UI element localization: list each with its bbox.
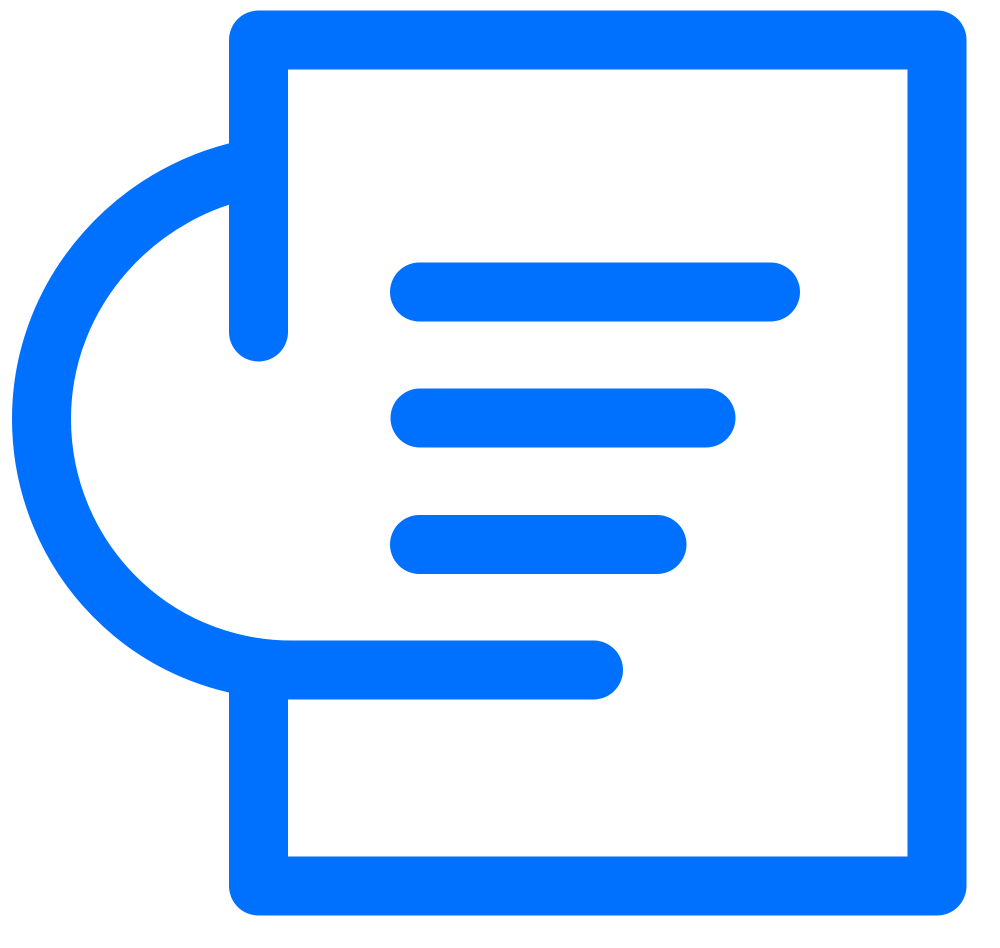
- text line 1: [420, 262, 770, 322]
- curved arrow line: [42, 168, 594, 670]
- text line 2: [420, 388, 706, 448]
- text line 3: [420, 515, 657, 574]
- document outline: [258, 40, 937, 886]
